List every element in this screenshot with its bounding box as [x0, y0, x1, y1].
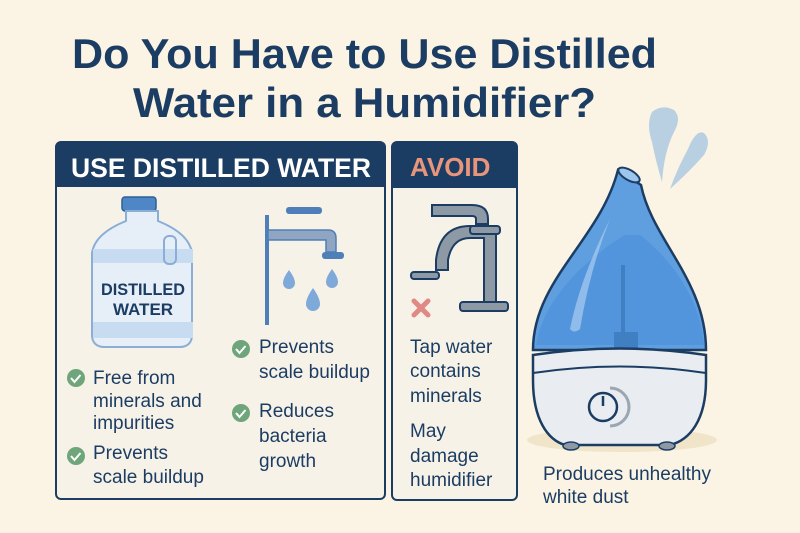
- caption: white dust: Produces unhealthy: [543, 464, 711, 485]
- list: right benefits: Reduces: [259, 401, 334, 422]
- icon: check: [232, 340, 250, 358]
- list: right benefits: bacteria: [259, 426, 327, 447]
- panel: avoid: [392, 142, 517, 500]
- panel header: use distilled water: [56, 142, 385, 187]
- title: [72, 30, 657, 126]
- icon: check: [232, 404, 250, 422]
- text: avoid reasons: damage: [410, 446, 479, 467]
- caption: white dust: white dust: [542, 487, 629, 508]
- list: left benefits: impurities: [93, 413, 174, 434]
- list: left benefits: Free from: [93, 368, 175, 389]
- icon: distilled water jug: WATER: [113, 300, 173, 319]
- icon: distilled water jug: DISTILLED: [101, 280, 185, 299]
- title: Water in a Humidifier?: [133, 79, 596, 126]
- icon: check: [67, 447, 85, 465]
- text: avoid reasons: minerals: [410, 386, 482, 407]
- list: right benefits: Prevents: [259, 337, 334, 358]
- panel header: use distilled water: USE DISTILLED WATER: [71, 153, 371, 183]
- icon: steam: [649, 107, 708, 189]
- list: right benefits: growth: [259, 451, 316, 472]
- text: avoid reasons: humidifier: [410, 470, 493, 491]
- list: left benefits: scale buildup: [93, 467, 204, 488]
- panel header: avoid: [392, 142, 517, 188]
- icon: distilled water jug: [92, 197, 193, 347]
- icon: humidifier: [527, 165, 717, 452]
- panel header: avoid: AVOID: [410, 152, 490, 182]
- icon: tap: [411, 205, 508, 311]
- panel: use distilled water: [56, 142, 385, 499]
- icon: red x: [414, 301, 428, 315]
- text: avoid reasons: Tap water: [410, 337, 493, 358]
- list: left benefits: [67, 368, 204, 488]
- list: right benefits: [232, 337, 370, 472]
- list: left benefits: minerals and: [93, 391, 202, 412]
- list: right benefits: scale buildup: [259, 362, 370, 383]
- icon: faucet with drops: [265, 207, 344, 325]
- text: avoid reasons: contains: [410, 361, 481, 382]
- caption: white dust: [542, 464, 711, 508]
- list: left benefits: Prevents: [93, 443, 168, 464]
- text: avoid reasons: May: [410, 421, 446, 442]
- text: avoid reasons: [410, 337, 493, 491]
- title: Do You Have to Use Distilled: [72, 30, 657, 77]
- icon: check: [67, 369, 85, 387]
